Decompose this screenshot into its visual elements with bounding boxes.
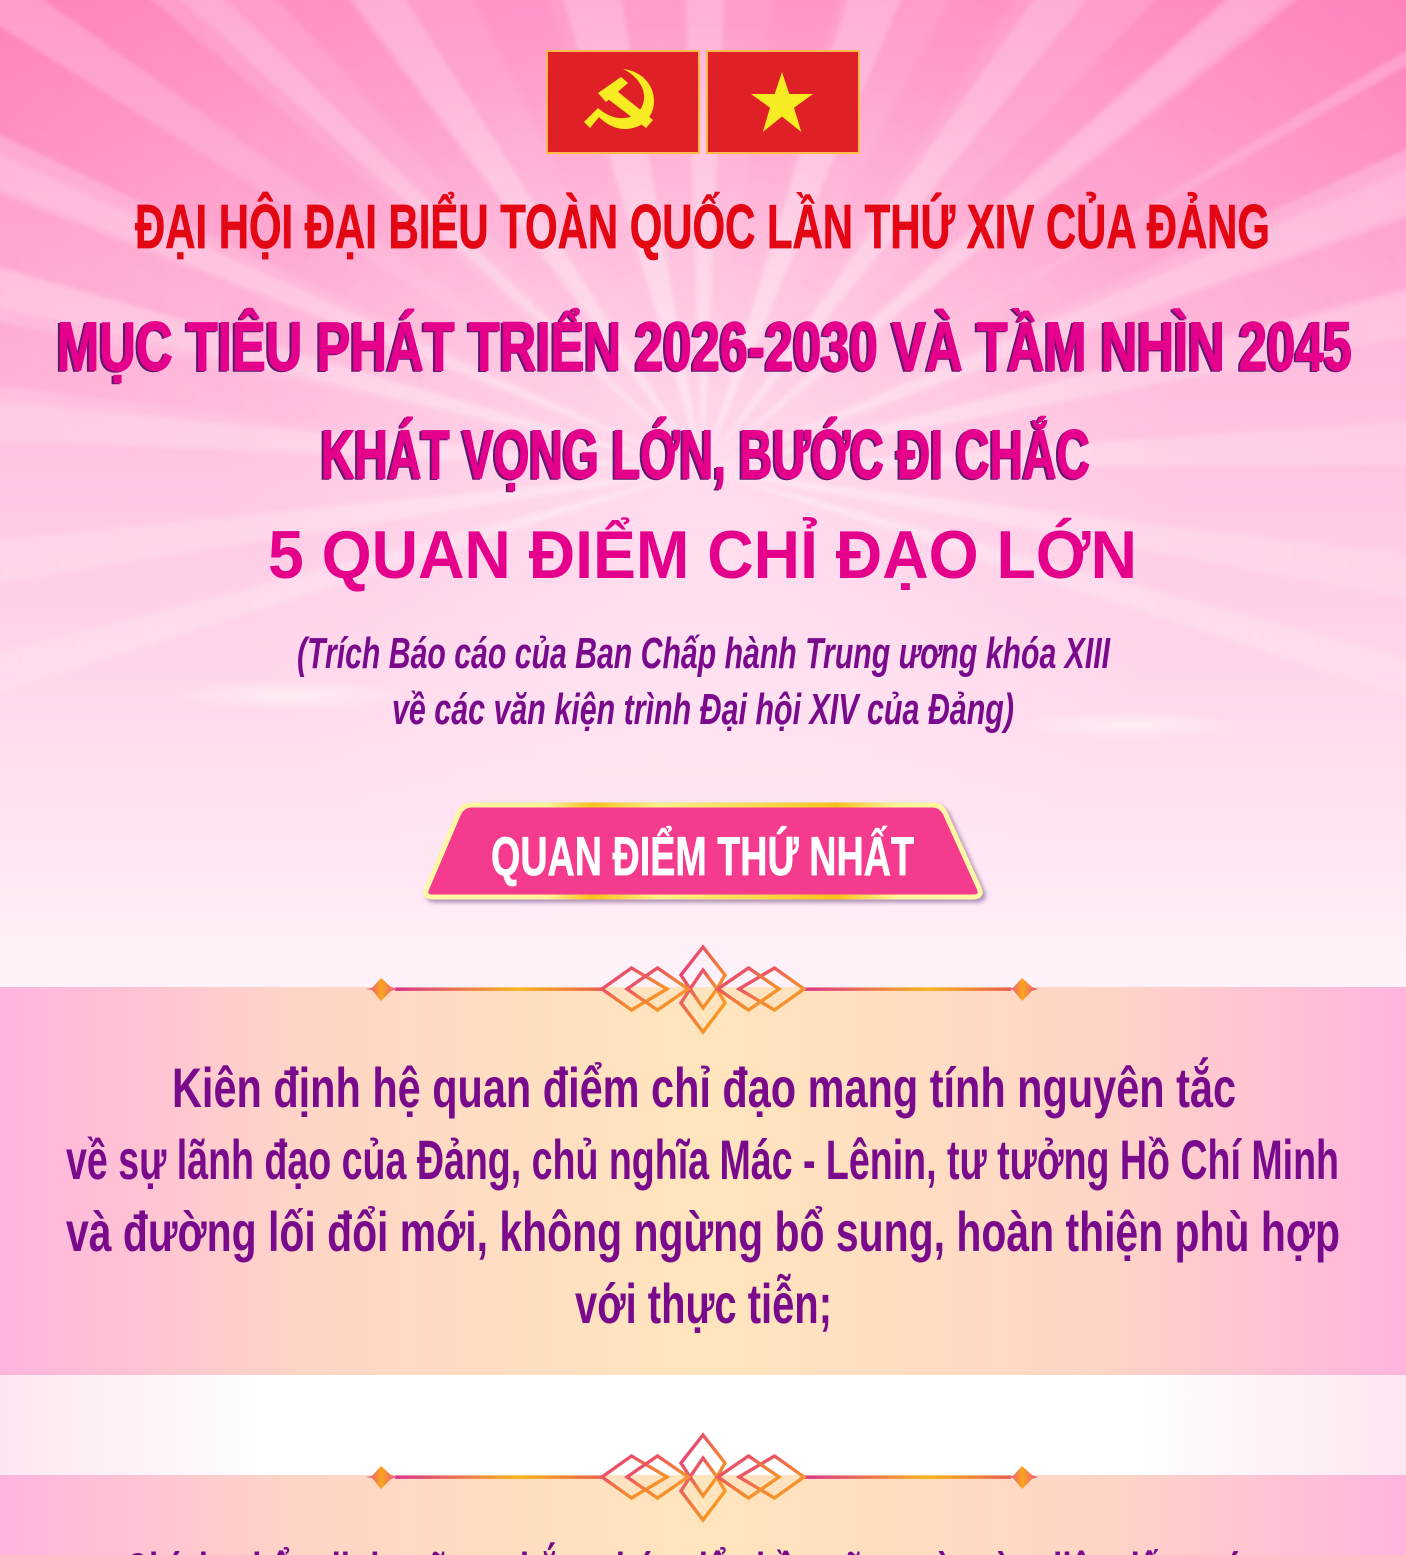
body text: first viewpoint (66, 1056, 1340, 1335)
body text: first viewpoint: với thực tiễn; (575, 1272, 832, 1335)
flags (547, 51, 859, 153)
label button: first viewpoint (426, 805, 980, 897)
ornament: second divider (366, 1435, 1038, 1520)
panel: first viewpoint text band (0, 987, 1406, 1375)
flag: hammer and sickle (547, 51, 699, 153)
white gap (0, 1375, 1406, 1475)
source note: về các văn kiện trình Đại hội XIV của Đảng) (392, 685, 1014, 734)
flag: yellow star (707, 51, 859, 153)
heading: five viewpoints: 5 QUAN ĐIỂM CHỈ ĐẠO LỚN (268, 516, 1137, 593)
ornament: first divider (366, 947, 1038, 1032)
source note (297, 629, 1111, 734)
label button: first viewpoint: QUAN ĐIỂM THỨ NHẤT (491, 825, 914, 887)
background rays (0, 0, 1406, 990)
panel: second viewpoint text band (0, 1475, 1406, 1555)
